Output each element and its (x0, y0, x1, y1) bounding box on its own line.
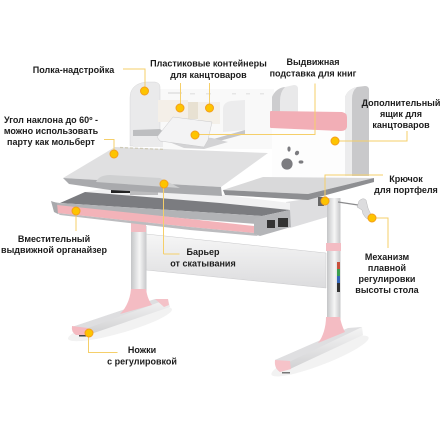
organizer inner band (53, 202, 262, 224)
inner shelf plank (210, 130, 245, 143)
callout dots (72, 87, 376, 337)
label: bag hook: Крючок (389, 174, 423, 184)
label: tilt angle: можно использовать (4, 126, 99, 136)
upper left shelf upright (130, 82, 160, 146)
book stand base (159, 134, 228, 149)
label: book stand: подставка для книг (270, 68, 357, 78)
label: height mechanism: высоты стола (355, 285, 420, 295)
label: extra drawer: канцтоваров (372, 120, 430, 130)
label: plastic containers: для канцтоваров (170, 70, 247, 80)
label: height mechanism: регулировки (359, 274, 415, 284)
label: adjustable feet: с регулировкой (107, 356, 177, 366)
tilting desktop (63, 147, 268, 187)
right desktop (223, 177, 374, 194)
inner shelf upright (223, 100, 245, 132)
container right (198, 102, 220, 124)
book stand (157, 117, 212, 147)
label: tilt angle: парту как мольберт (7, 137, 96, 147)
left leg (72, 220, 170, 336)
right compartment upright (272, 85, 298, 113)
left leg shadow (66, 300, 174, 348)
label: shelf: Полка-надстройка (33, 65, 115, 75)
label: organizer: Вместительный (18, 234, 90, 244)
organizer lower edge (57, 213, 258, 236)
label: adjustable feet: Ножки (128, 345, 156, 355)
label: anti-roll barrier: от скатывания (170, 258, 236, 268)
shelf plank (133, 129, 166, 137)
container divider (188, 102, 198, 119)
right leg shadow (268, 329, 372, 383)
label: extra drawer: Дополнительный (362, 98, 440, 108)
pencil tray details (120, 148, 165, 150)
mechanism black parts (111, 189, 130, 193)
label: bag hook: для портфеля (374, 185, 438, 195)
barrier panel (146, 234, 326, 288)
label: extra drawer: ящик для (380, 109, 422, 119)
board pale marks (168, 92, 264, 94)
callout lines (76, 69, 407, 352)
label: organizer: выдвижной органайзер (1, 245, 107, 255)
crank handle (338, 199, 371, 220)
panel holes (281, 146, 303, 170)
container left (158, 100, 188, 122)
desktop groove (96, 175, 180, 188)
label: height mechanism: плавной (368, 263, 406, 273)
label: height mechanism: Механизм (365, 252, 409, 262)
back board (160, 89, 274, 149)
organizer left cap (51, 201, 58, 214)
pink organizer strip (57, 205, 254, 233)
label: tilt angle: Угол наклона до 60º - (4, 115, 98, 125)
white compartment panel (272, 125, 347, 179)
hook bracket (318, 197, 324, 206)
desk illustration (51, 82, 374, 383)
side mechanism box (286, 196, 327, 228)
label: book stand: Выдвижная (286, 57, 340, 67)
right leg (275, 198, 363, 374)
organizer tray (60, 192, 290, 216)
under-desk frame (85, 188, 290, 210)
organizer end (254, 210, 291, 236)
label: plastic containers: Пластиковые контейнеры (150, 58, 267, 68)
pink drawer front (270, 111, 347, 131)
label: anti-roll barrier: Барьер (186, 247, 220, 257)
far upright (345, 86, 369, 176)
